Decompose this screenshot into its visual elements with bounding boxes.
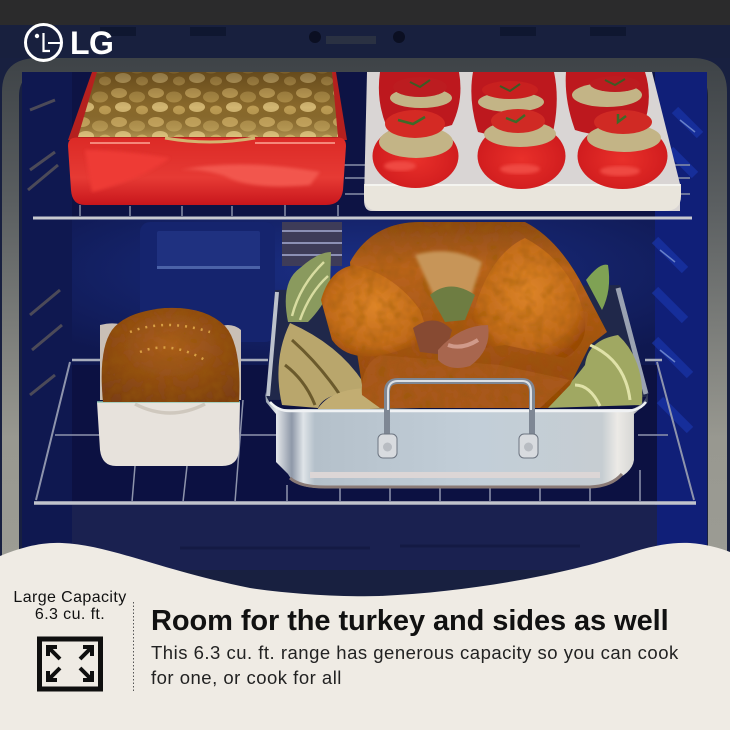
- back row tomatoes: [379, 72, 649, 137]
- capacity icon: [40, 639, 100, 689]
- roast turkey: [321, 222, 607, 408]
- LG logo circle: [26, 24, 62, 60]
- oven door frame: [2, 58, 727, 565]
- roasting pan front: [265, 392, 648, 488]
- white tray with stuffed tomatoes: [364, 72, 681, 211]
- capacity label: Large Capacity: [13, 589, 127, 606]
- oven cavity: [22, 72, 707, 570]
- cream wave background: [0, 543, 730, 730]
- front row tomatoes: [372, 109, 668, 189]
- pan handle: [378, 381, 538, 458]
- top rack: [33, 165, 692, 218]
- red casserole dish with macaroni: [68, 72, 347, 205]
- body text: [151, 642, 679, 688]
- headline: Room for the turkey and sides as well: [151, 605, 669, 637]
- cabbage sides: [278, 252, 642, 410]
- lower rack: [34, 360, 696, 503]
- roasting pan back: [266, 285, 648, 400]
- capacity label: 6.3 cu. ft.: [35, 606, 105, 623]
- side wall reflections: [28, 100, 700, 430]
- body text: for one, or cook for all: [151, 667, 342, 688]
- capacity label: [13, 589, 127, 623]
- bread loaf dish: [97, 308, 241, 466]
- LG wordmark: LG: [70, 25, 113, 61]
- body text: This 6.3 cu. ft. range has generous capacity so you can cook: [151, 642, 679, 663]
- dotted divider: [132, 602, 134, 693]
